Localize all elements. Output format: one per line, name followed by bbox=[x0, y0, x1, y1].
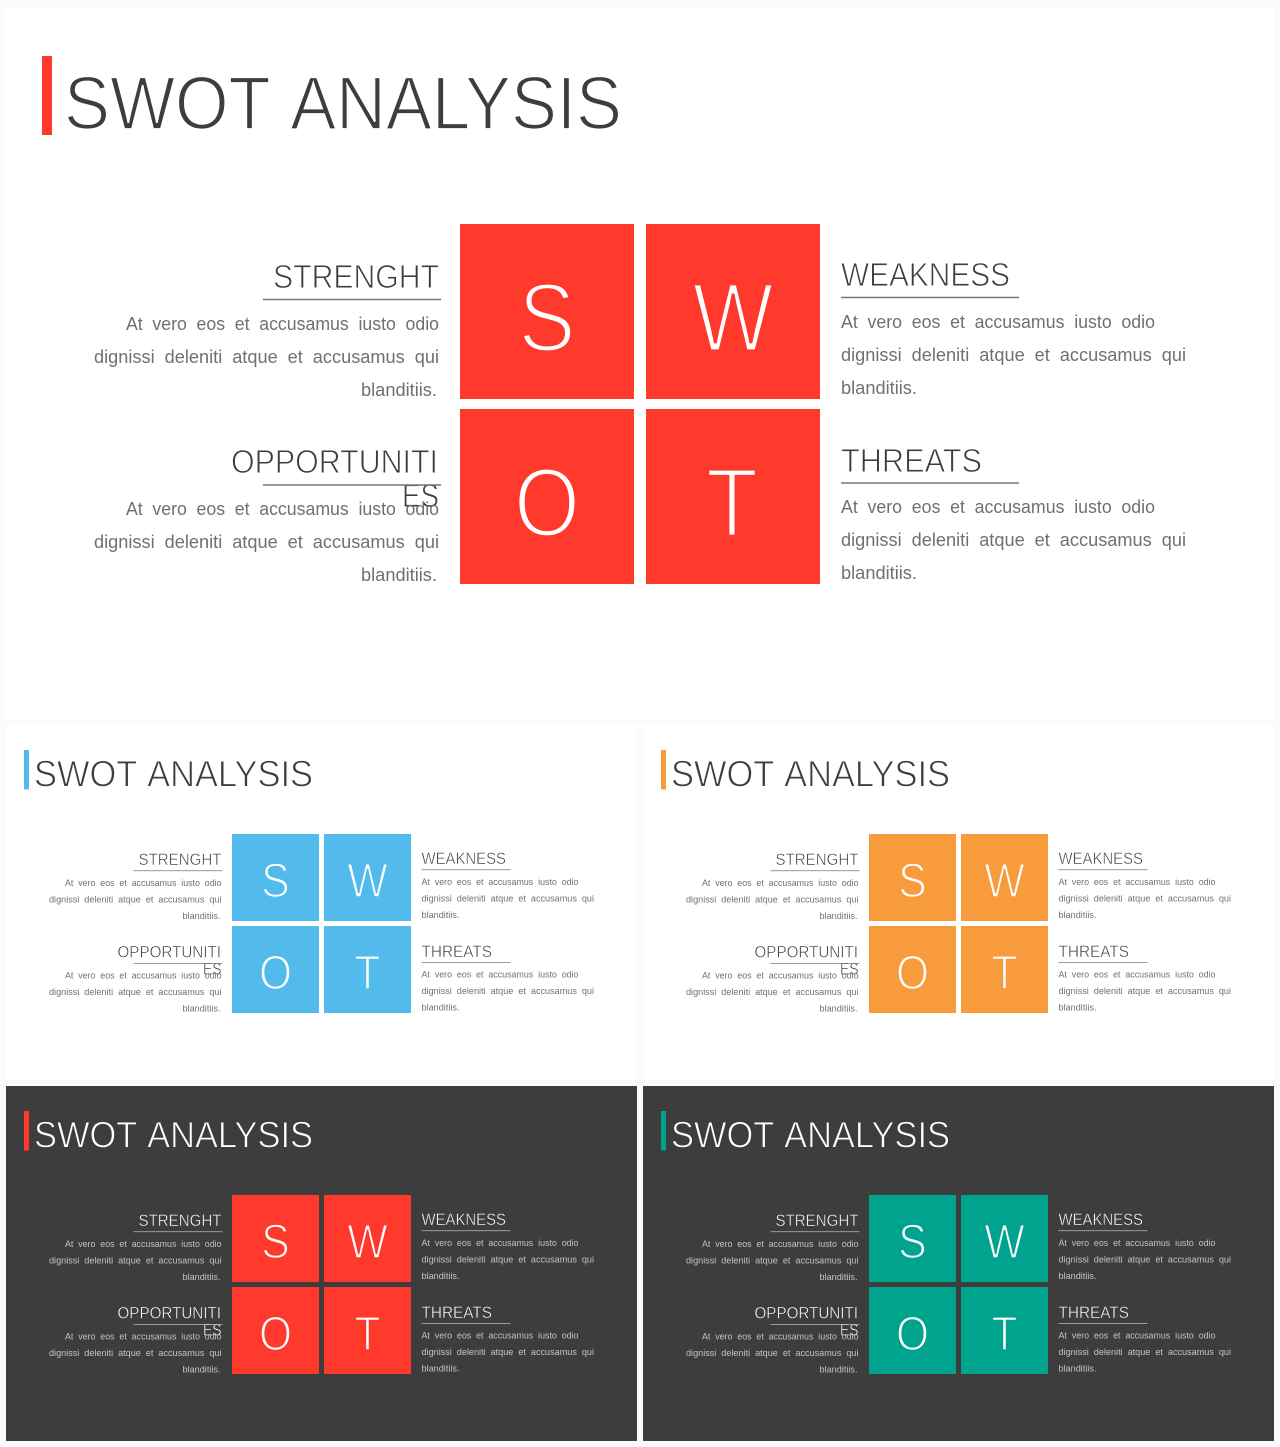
threats block: dignissi deleniti atque et accusamus qui bbox=[1058, 986, 1231, 996]
title accent bar bbox=[661, 750, 666, 790]
opportunities block bbox=[49, 1304, 222, 1374]
threats block: THREATS bbox=[1058, 943, 1129, 961]
title: SWOT ANALYSIS bbox=[671, 1114, 950, 1156]
title accent bar bbox=[661, 1111, 666, 1150]
threats block: dignissi deleniti atque et accusamus qui bbox=[422, 986, 594, 996]
opportunities block: OPPORTUNITI bbox=[118, 944, 221, 962]
opportunities block: OPPORTUNITI bbox=[231, 443, 438, 480]
threats block: At vero eos et accusamus iusto odio bbox=[422, 970, 578, 980]
threats block: blanditiis. bbox=[422, 1364, 460, 1374]
SWOT matrix: W bbox=[347, 1215, 388, 1269]
panel: blue SWOT slide bbox=[6, 725, 637, 1080]
title accent bar bbox=[42, 56, 52, 135]
strength block: dignissi deleniti atque et accusamus qui bbox=[49, 894, 222, 904]
strength block: blanditiis. bbox=[820, 911, 858, 921]
weakness block: WEAKNESS bbox=[422, 1211, 506, 1229]
strength block: STRENGHT bbox=[776, 851, 858, 869]
strength block: At vero eos et accusamus iusto odio bbox=[702, 1239, 858, 1249]
title: SWOT ANALYSIS bbox=[64, 61, 622, 145]
opportunities block: ES bbox=[840, 960, 858, 978]
SWOT matrix: W bbox=[984, 854, 1025, 908]
threats block: At vero eos et accusamus iusto odio bbox=[1058, 1330, 1216, 1340]
threats block: dignissi deleniti atque et accusamus qui bbox=[1058, 1347, 1231, 1357]
threats block: At vero eos et accusamus iusto odio bbox=[1058, 970, 1216, 980]
weakness block: dignissi deleniti atque et accusamus qui bbox=[422, 894, 594, 904]
panel: dark SWOT slide with red accent bbox=[6, 1086, 637, 1441]
SWOT matrix bbox=[232, 834, 411, 1013]
threats block bbox=[1058, 943, 1231, 1012]
SWOT matrix: O bbox=[259, 1307, 292, 1361]
weakness block: dignissi deleniti atque et accusamus qui bbox=[841, 344, 1186, 365]
strength block: STRENGHT bbox=[138, 1212, 222, 1230]
opportunities block: blanditiis. bbox=[820, 1364, 858, 1374]
threats block bbox=[422, 943, 594, 1012]
opportunities block: blanditiis. bbox=[182, 1364, 220, 1374]
weakness block: dignissi deleniti atque et accusamus qui bbox=[422, 1254, 594, 1264]
strength block bbox=[49, 1212, 222, 1282]
weakness block: blanditiis. bbox=[422, 910, 460, 920]
opportunities block: ES bbox=[840, 1322, 858, 1340]
weakness block: blanditiis. bbox=[841, 377, 917, 398]
SWOT matrix: T bbox=[706, 448, 758, 557]
strength block bbox=[94, 258, 441, 400]
panel: red SWOT slide (large) bbox=[5, 8, 1274, 720]
SWOT matrix: S bbox=[261, 854, 290, 908]
SWOT matrix: S bbox=[518, 263, 576, 372]
panel: orange SWOT slide bbox=[643, 725, 1274, 1080]
threats block: blanditiis. bbox=[1058, 1364, 1096, 1374]
weakness block: WEAKNESS bbox=[1058, 850, 1143, 868]
threats block: dignissi deleniti atque et accusamus qui bbox=[841, 529, 1186, 550]
opportunities block: blanditiis. bbox=[182, 1004, 220, 1014]
threats block: THREATS bbox=[841, 442, 982, 479]
strength block: STRENGHT bbox=[273, 258, 439, 295]
SWOT matrix: T bbox=[354, 946, 380, 1000]
weakness block: At vero eos et accusamus iusto odio bbox=[1058, 1238, 1216, 1248]
opportunities block: dignissi deleniti atque et accusamus qui bbox=[686, 1348, 858, 1358]
title: SWOT ANALYSIS bbox=[671, 752, 950, 794]
weakness block bbox=[422, 850, 594, 920]
strength block: dignissi deleniti atque et accusamus qui bbox=[49, 1256, 222, 1266]
title accent bar bbox=[24, 1111, 29, 1150]
opportunities block bbox=[686, 944, 860, 1014]
SWOT matrix: W bbox=[347, 854, 388, 908]
SWOT matrix: T bbox=[992, 1307, 1018, 1361]
strength block: dignissi deleniti atque et accusamus qui bbox=[686, 894, 858, 904]
opportunities block: At vero eos et accusamus iusto odio bbox=[65, 970, 222, 980]
SWOT matrix: W bbox=[984, 1215, 1025, 1269]
threats block: dignissi deleniti atque et accusamus qui bbox=[422, 1347, 594, 1357]
opportunities block: blanditiis. bbox=[361, 564, 437, 585]
SWOT matrix: O bbox=[259, 946, 292, 1000]
title: SWOT ANALYSIS bbox=[34, 1114, 313, 1156]
threats block bbox=[422, 1304, 594, 1374]
title: SWOT ANALYSIS bbox=[34, 752, 313, 794]
SWOT matrix: S bbox=[898, 1215, 927, 1269]
strength block bbox=[49, 851, 222, 921]
weakness block: At vero eos et accusamus iusto odio bbox=[1058, 877, 1216, 887]
threats block: At vero eos et accusamus iusto odio bbox=[841, 496, 1155, 517]
threats block bbox=[841, 442, 1186, 583]
weakness block: At vero eos et accusamus iusto odio bbox=[422, 877, 578, 887]
threats block: blanditiis. bbox=[1058, 1002, 1096, 1012]
SWOT matrix: O bbox=[896, 946, 929, 1000]
strength block: At vero eos et accusamus iusto odio bbox=[65, 878, 222, 888]
SWOT matrix: S bbox=[898, 854, 927, 908]
strength block: At vero eos et accusamus iusto odio bbox=[126, 313, 439, 334]
opportunities block: OPPORTUNITI bbox=[754, 1304, 858, 1322]
strength block: STRENGHT bbox=[776, 1212, 858, 1230]
SWOT matrix: S bbox=[261, 1215, 290, 1269]
SWOT matrix bbox=[869, 834, 1048, 1013]
strength block: blanditiis. bbox=[820, 1272, 858, 1282]
threats block: blanditiis. bbox=[841, 562, 917, 583]
strength block bbox=[686, 851, 860, 921]
SWOT matrix: O bbox=[896, 1307, 929, 1361]
weakness block: dignissi deleniti atque et accusamus qui bbox=[1058, 1254, 1231, 1264]
opportunities block bbox=[686, 1304, 860, 1374]
opportunities block: At vero eos et accusamus iusto odio bbox=[126, 498, 439, 519]
weakness block bbox=[422, 1211, 594, 1281]
weakness block bbox=[841, 256, 1186, 398]
threats block: THREATS bbox=[1058, 1304, 1129, 1322]
threats block: THREATS bbox=[422, 1304, 492, 1322]
opportunities block: dignissi deleniti atque et accusamus qui bbox=[94, 531, 439, 552]
SWOT matrix bbox=[869, 1195, 1048, 1374]
opportunities block: dignissi deleniti atque et accusamus qui bbox=[49, 987, 222, 997]
threats block: At vero eos et accusamus iusto odio bbox=[422, 1330, 578, 1340]
SWOT matrix: T bbox=[354, 1307, 380, 1361]
opportunities block: ES bbox=[203, 1322, 222, 1340]
threats block: THREATS bbox=[422, 943, 492, 961]
opportunities block: OPPORTUNITI bbox=[118, 1304, 221, 1322]
weakness block: blanditiis. bbox=[422, 1271, 460, 1281]
opportunities block: dignissi deleniti atque et accusamus qui bbox=[49, 1348, 222, 1358]
opportunities block bbox=[94, 443, 441, 585]
opportunities block bbox=[49, 944, 222, 1014]
strength block: At vero eos et accusamus iusto odio bbox=[65, 1239, 222, 1249]
opportunities block: ES bbox=[402, 477, 439, 514]
weakness block: At vero eos et accusamus iusto odio bbox=[422, 1238, 578, 1248]
opportunities block: OPPORTUNITI bbox=[754, 944, 858, 962]
panel: dark SWOT slide with teal accent bbox=[643, 1086, 1274, 1441]
weakness block bbox=[1058, 1211, 1231, 1281]
threats block: blanditiis. bbox=[422, 1002, 460, 1012]
SWOT matrix: O bbox=[514, 448, 580, 557]
opportunities block: dignissi deleniti atque et accusamus qui bbox=[686, 987, 858, 997]
weakness block: WEAKNESS bbox=[1058, 1211, 1143, 1229]
weakness block: blanditiis. bbox=[1058, 1271, 1096, 1281]
strength block: dignissi deleniti atque et accusamus qui bbox=[686, 1256, 858, 1266]
opportunities block: At vero eos et accusamus iusto odio bbox=[702, 970, 858, 980]
strength block: blanditiis. bbox=[182, 1272, 220, 1282]
weakness block bbox=[1058, 850, 1231, 920]
strength block: At vero eos et accusamus iusto odio bbox=[702, 878, 858, 888]
strength block: dignissi deleniti atque et accusamus qui bbox=[94, 346, 439, 367]
weakness block: WEAKNESS bbox=[841, 256, 1010, 293]
weakness block: At vero eos et accusamus iusto odio bbox=[841, 311, 1155, 332]
SWOT matrix: T bbox=[992, 946, 1018, 1000]
strength block: STRENGHT bbox=[138, 851, 222, 869]
strength block: blanditiis. bbox=[182, 911, 220, 921]
strength block: blanditiis. bbox=[361, 379, 437, 400]
opportunities block: At vero eos et accusamus iusto odio bbox=[65, 1332, 222, 1342]
opportunities block: ES bbox=[203, 960, 222, 978]
weakness block: dignissi deleniti atque et accusamus qui bbox=[1058, 894, 1231, 904]
opportunities block: blanditiis. bbox=[820, 1004, 858, 1014]
threats block bbox=[1058, 1304, 1231, 1374]
SWOT matrix: W bbox=[692, 263, 774, 372]
weakness block: blanditiis. bbox=[1058, 910, 1096, 920]
strength block bbox=[686, 1212, 860, 1282]
weakness block: WEAKNESS bbox=[422, 850, 506, 868]
opportunities block: At vero eos et accusamus iusto odio bbox=[702, 1332, 858, 1342]
title accent bar bbox=[24, 750, 29, 790]
SWOT matrix bbox=[232, 1195, 411, 1374]
SWOT matrix bbox=[460, 224, 820, 584]
